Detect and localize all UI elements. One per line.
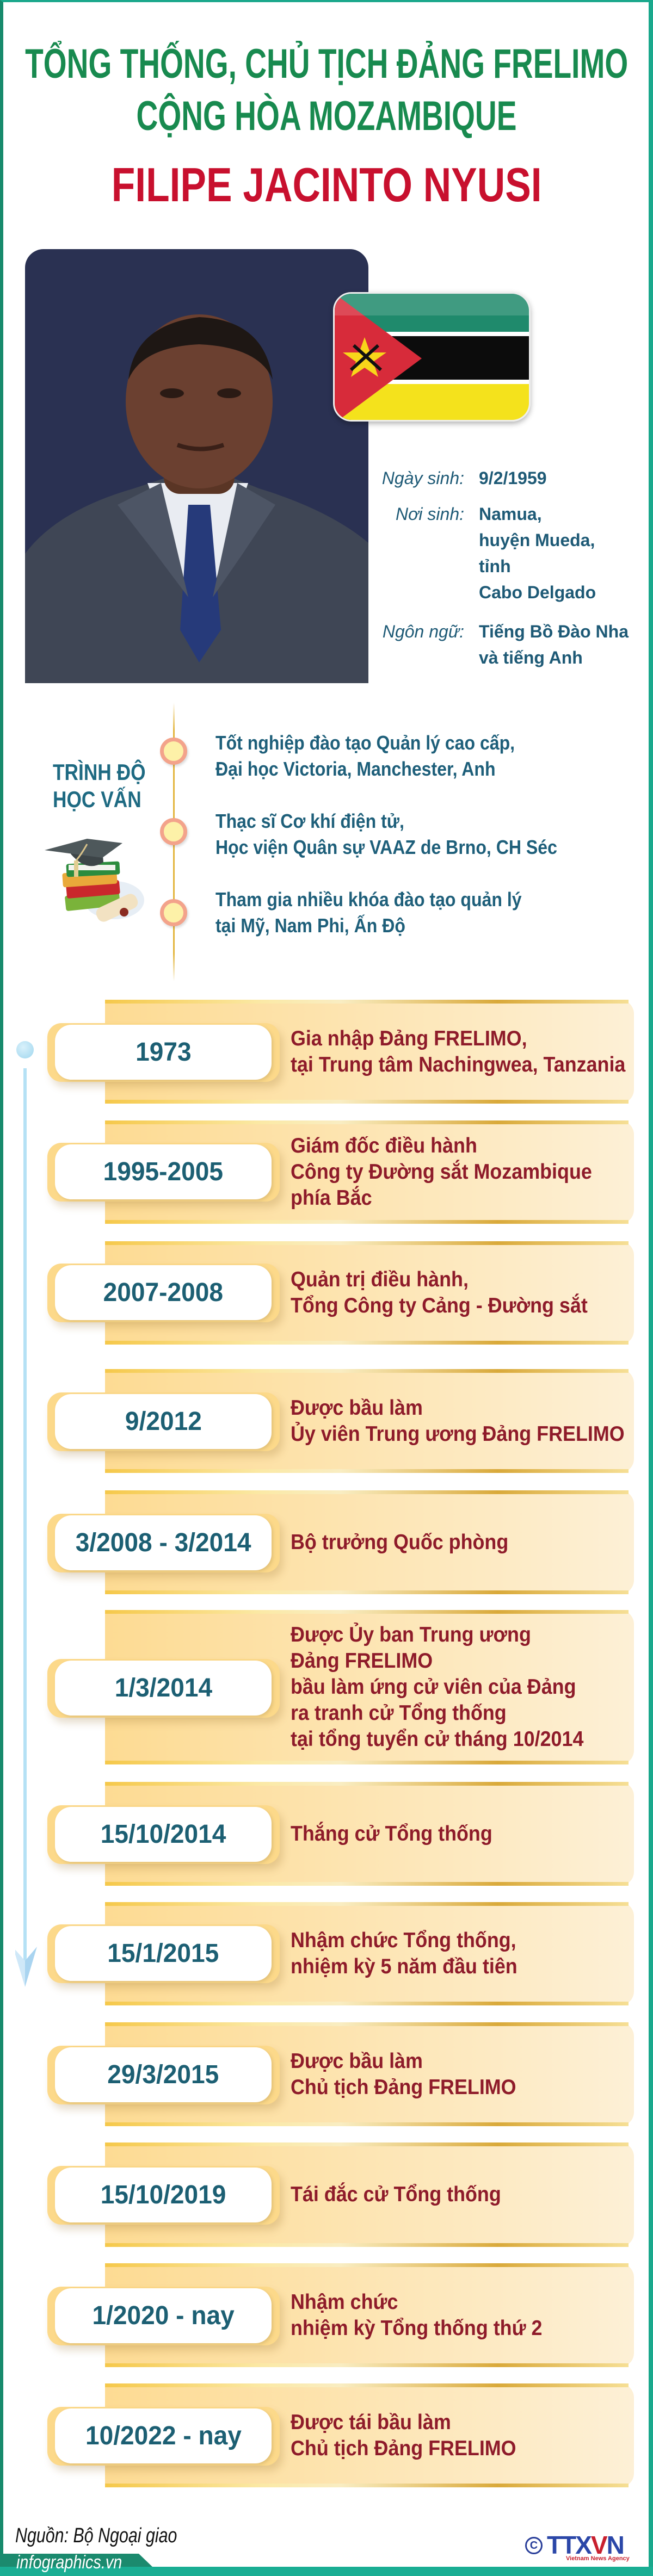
timeline card: 15/1/2015: nhiệm kỳ 5 năm đầu tiên [291,1955,518,1978]
timeline card: 2007-2008: Tổng Công ty Cảng - Đường sắt [291,1294,588,1317]
education bullet 2 [160,818,187,845]
portrait photo [25,249,368,683]
timeline card: 1/3/2014: tại tổng tuyển cử tháng 10/2014 [291,1727,583,1751]
education item 3: Tham gia nhiều khóa đào tạo quản lý [215,888,522,911]
timeline card: 1/3/2014: bầu làm ứng cử viên của Đảng [291,1675,576,1699]
timeline card: 1995-2005: Giám đốc điều hành [291,1134,477,1157]
info: birth place: tỉnh [479,556,511,576]
timeline line with arrow [15,1041,37,1987]
footer band with site name: infographics.vn [16,2552,122,2573]
timeline card: 29/3/2015: Được bầu làm [291,2049,423,2072]
education item 2 [215,810,557,858]
icon: graduation cap and books [45,839,144,922]
timeline card: 1/2020 - nay: 1/2020 - nay [92,2301,235,2330]
education item 1 [215,732,515,780]
education item 1: Đại học Victoria, Manchester, Anh [215,758,496,780]
title: line 1: TỔNG THỐNG, CHỦ TỊCH ĐẢNG FRELIMO [25,41,628,87]
timeline card: 9/2012: Ủy viên Trung ương Đảng FRELIMO [291,1422,625,1446]
education bullet 3 [160,899,187,926]
timeline card: 1973 [47,1000,634,1104]
title: line 2: CỘNG HÒA MOZAMBIQUE [137,93,516,139]
timeline card: 1995-2005: Công ty Đường sắt Mozambique [291,1160,592,1184]
info: languages: Ngôn ngữ: [383,622,464,641]
timeline card: 2007-2008 [47,1241,634,1345]
timeline card: 10/2022 - nay [47,2383,634,2487]
timeline card: 15/10/2014: 15/10/2014 [101,1820,226,1849]
timeline card: 2007-2008: 2007-2008 [103,1278,223,1307]
education heading [53,759,146,812]
timeline card: 15/1/2015: 15/1/2015 [107,1939,219,1968]
title: person name: FILIPE JACINTO NYUSI [112,158,541,212]
timeline card: 15/10/2019: 15/10/2019 [101,2181,226,2209]
info: birth place: Namua, [479,504,542,524]
timeline card: 1/3/2014: Được Ủy ban Trung ương [291,1623,531,1646]
timeline card: 2007-2008: Quản trị điều hành, [291,1268,469,1291]
education section [45,704,557,980]
timeline card: 1995-2005 [47,1120,634,1224]
timeline card: 15/1/2015: Nhậm chức Tổng thống, [291,1929,516,1952]
education item 3 [215,888,522,937]
education item 1: Tốt nghiệp đào tạo Quản lý cao cấp, [215,732,515,754]
timeline card: 9/2012 [47,1369,634,1473]
timeline card: 1/3/2014: 1/3/2014 [114,1674,212,1702]
timeline card: 3/2008 - 3/2014: 3/2008 - 3/2014 [76,1528,251,1557]
timeline card: 1/2020 - nay: nhiệm kỳ Tổng thống thứ 2 [291,2316,543,2340]
timeline card: 1995-2005: 1995-2005 [103,1157,223,1186]
education heading: HỌC VẤN [53,787,141,812]
info: birth date: Ngày sinh: [382,468,464,488]
footer band with site name [0,2552,649,2576]
timeline card: 1/3/2014: ra tranh cử Tổng thống [291,1701,507,1725]
timeline card: 10/2022 - nay: Chủ tịch Đảng FRELIMO [291,2437,516,2460]
logo: TTXVN [525,2531,630,2562]
timeline card: 1/3/2014: Đảng FRELIMO [291,1649,433,1673]
info: birth place: huyện Mueda, [479,530,595,550]
info: birth date: 9/2/1959 [479,468,547,488]
timeline card: 1973: 1973 [135,1038,191,1067]
timeline card: 1973: Gia nhập Đảng FRELIMO, [291,1027,527,1050]
timeline card: 29/3/2015 [47,2022,634,2126]
timeline card: 10/2022 - nay: Được tái bầu làm [291,2411,451,2433]
flag of Mozambique [333,292,531,422]
timeline card: 9/2012: 9/2012 [125,1407,201,1436]
education item 2: Học viện Quân sự VAAZ de Brno, CH Séc [215,836,557,858]
timeline card: 29/3/2015: 29/3/2015 [107,2060,219,2089]
info: birth date [382,468,547,488]
education item 3: tại Mỹ, Nam Phi, Ấn Độ [215,914,405,937]
timeline card: 15/10/2019: Tái đắc cử Tổng thống [291,2183,501,2206]
info: languages: Tiếng Bồ Đào Nha [479,622,629,641]
timeline card: 3/2008 - 3/2014 [47,1490,634,1594]
info: languages: và tiếng Anh [479,648,583,667]
logo: TTXVN: Vietnam News Agency [566,2555,630,2562]
timeline card: 1/2020 - nay: Nhậm chức [291,2290,398,2314]
personal info block [382,468,629,667]
timeline card: 1995-2005: phía Bắc [291,1186,372,1210]
education vertical line [173,703,175,981]
source note: Nguồn: Bộ Ngoại giao [15,2524,177,2547]
timeline card: 15/10/2014: Thắng cử Tổng thống [291,1822,492,1845]
education bullet 1 [160,738,187,765]
timeline card: 1/3/2014 [47,1610,634,1764]
timeline card: 10/2022 - nay: 10/2022 - nay [85,2422,241,2450]
logo: TTXVN: TTXVN [547,2531,624,2559]
timeline card: 1/2020 - nay [47,2263,634,2367]
info: birth place [396,504,596,602]
education item 2: Thạc sĩ Cơ khí điện tử, [215,810,404,832]
timeline card: 9/2012: Được bầu làm [291,1396,423,1420]
timeline card: 15/10/2019 [47,2142,634,2247]
timeline card: 3/2008 - 3/2014: Bộ trưởng Quốc phòng [291,1531,508,1553]
education heading: TRÌNH ĐỘ [53,759,146,785]
logo: TTXVN: C [530,2540,538,2552]
info: birth place: Nơi sinh: [396,504,464,524]
timeline card: 1973: tại Trung tâm Nachingwea, Tanzania [291,1053,625,1076]
info: languages [383,622,629,667]
timeline card: 29/3/2015: Chủ tịch Đảng FRELIMO [291,2076,516,2098]
timeline card: 15/10/2014 [47,1782,634,1886]
info: birth place: Cabo Delgado [479,583,596,602]
timeline card: 15/1/2015 [47,1902,634,2005]
